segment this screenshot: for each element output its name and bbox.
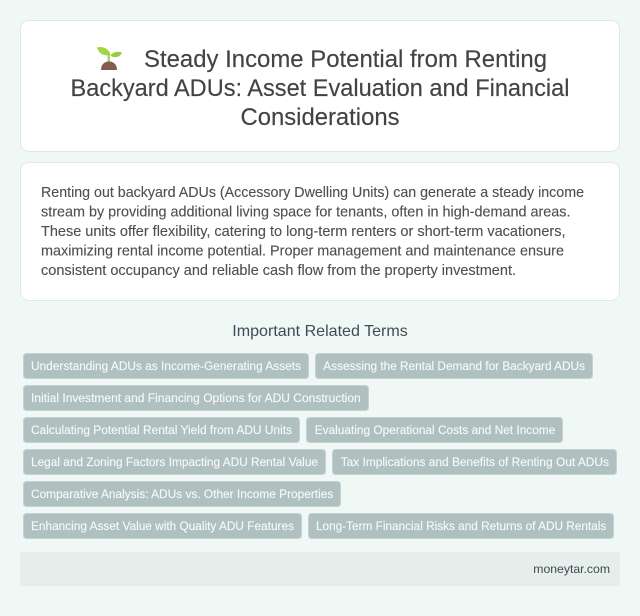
footer: [20, 552, 620, 586]
tag: asset value: [24, 514, 302, 538]
tag: rental demand: Assessing the Rental Demand for Backyard ADUs: [323, 359, 585, 373]
tag: comparative analysis: [24, 482, 340, 506]
title text: [70, 46, 570, 131]
tag: initial investment: [24, 386, 368, 410]
icon: seedling: [97, 47, 122, 70]
footer source text: moneytar.com: [533, 562, 610, 576]
tag: long-term risks: Long-Term Financial Risks and Returns of ADU Rentals: [316, 519, 606, 533]
tag: asset value: Enhancing Asset Value with Quality ADU Features: [31, 519, 294, 533]
tag: legal and zoning: [24, 450, 326, 474]
tag: understanding ADUs: Understanding ADUs as Income-Generating Assets: [31, 359, 301, 373]
description text: stream by providing additional living space for tenants, often in high-demand areas.: [41, 204, 570, 220]
tag: legal and zoning: Legal and Zoning Factors Impacting ADU Rental Value: [31, 455, 318, 469]
description text: maximizing rental income potential. Proper management and maintenance ensure: [41, 244, 564, 260]
tag: rental yield: Calculating Potential Rental Yield from ADU Units: [31, 423, 292, 437]
tag: comparative analysis: Comparative Analysis: ADUs vs. Other Income Properties: [31, 487, 333, 501]
tag: initial investment: Initial Investment and Financing Options for ADU Construction: [31, 391, 361, 405]
title text: Considerations: [240, 104, 400, 131]
description text: Renting out backyard ADUs (Accessory Dwelling Units) can generate a steady income: [41, 185, 584, 201]
panel: description: [20, 162, 620, 300]
tag: operational costs: [306, 418, 562, 442]
tag: tax implications: Tax Implications and Benefits of Renting Out ADUs: [341, 455, 609, 469]
tag: long-term risks: [308, 514, 614, 538]
description text: [41, 185, 584, 279]
tag: rental demand: [316, 354, 592, 378]
title text: Backyard ADUs: Asset Evaluation and Financial: [70, 75, 570, 102]
panel: related term tags: [24, 354, 616, 538]
description text: These units offer flexibility, catering to long-term renters or short-term vacationers,: [41, 224, 566, 240]
tag: understanding ADUs: [24, 354, 308, 378]
tag: tax implications: [332, 450, 616, 474]
heading: important related terms: Important Related Terms: [232, 323, 408, 340]
tag: rental yield: [24, 418, 300, 442]
tag: operational costs: Evaluating Operational Costs and Net Income: [315, 423, 555, 437]
description text: consistent occupancy and reliable cash flow from the property investment.: [41, 263, 516, 279]
title text: Steady Income Potential from Renting: [144, 46, 547, 73]
panel: title card: [20, 20, 620, 152]
